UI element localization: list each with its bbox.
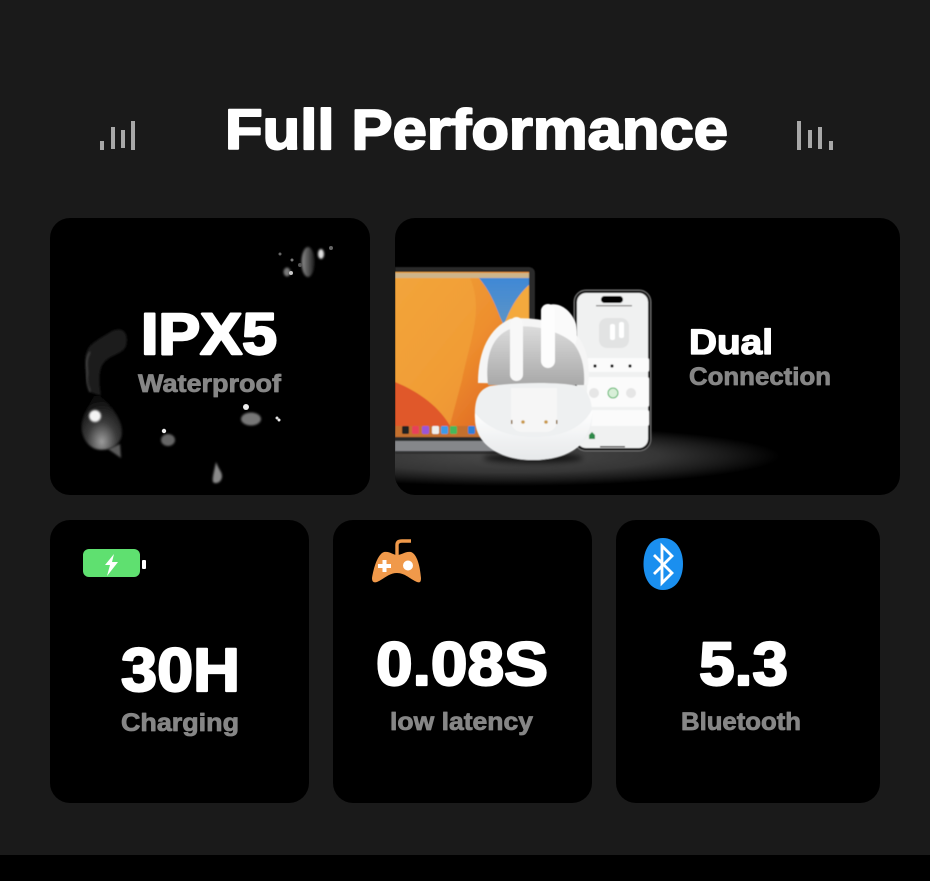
icon: battery	[83, 549, 146, 577]
earbuds charging case	[475, 304, 592, 463]
heading: Dual: Dual	[689, 323, 773, 362]
icon: game controller	[372, 541, 421, 582]
title: Full Performance	[225, 98, 728, 162]
label: Waterproof: Waterproof	[138, 370, 282, 398]
heading: IPX5: IPX5	[141, 302, 277, 367]
panel: dual connection	[395, 218, 900, 495]
bottom black band	[0, 855, 930, 881]
icon: left sound bars	[100, 121, 135, 150]
icon: bluetooth	[644, 538, 683, 590]
panel: latency	[333, 520, 592, 803]
label: Bluetooth: Bluetooth	[681, 708, 801, 736]
icon: right sound bars	[797, 121, 833, 150]
label: low latency: low latency	[390, 708, 533, 736]
water droplets	[82, 246, 333, 483]
panel: 30H charging	[50, 520, 309, 803]
phone	[574, 290, 651, 451]
panel: bluetooth	[616, 520, 880, 803]
stat: 5.3: 5.3	[699, 630, 788, 698]
laptop	[395, 267, 535, 454]
stat: 30H: 30H	[121, 636, 240, 704]
panel: IPX5 waterproof	[50, 218, 370, 495]
label: Connection: Connection	[689, 363, 831, 391]
label: Charging: Charging	[121, 709, 239, 737]
stat: 0.08S: 0.08S	[376, 630, 548, 698]
floor glow	[395, 433, 763, 484]
